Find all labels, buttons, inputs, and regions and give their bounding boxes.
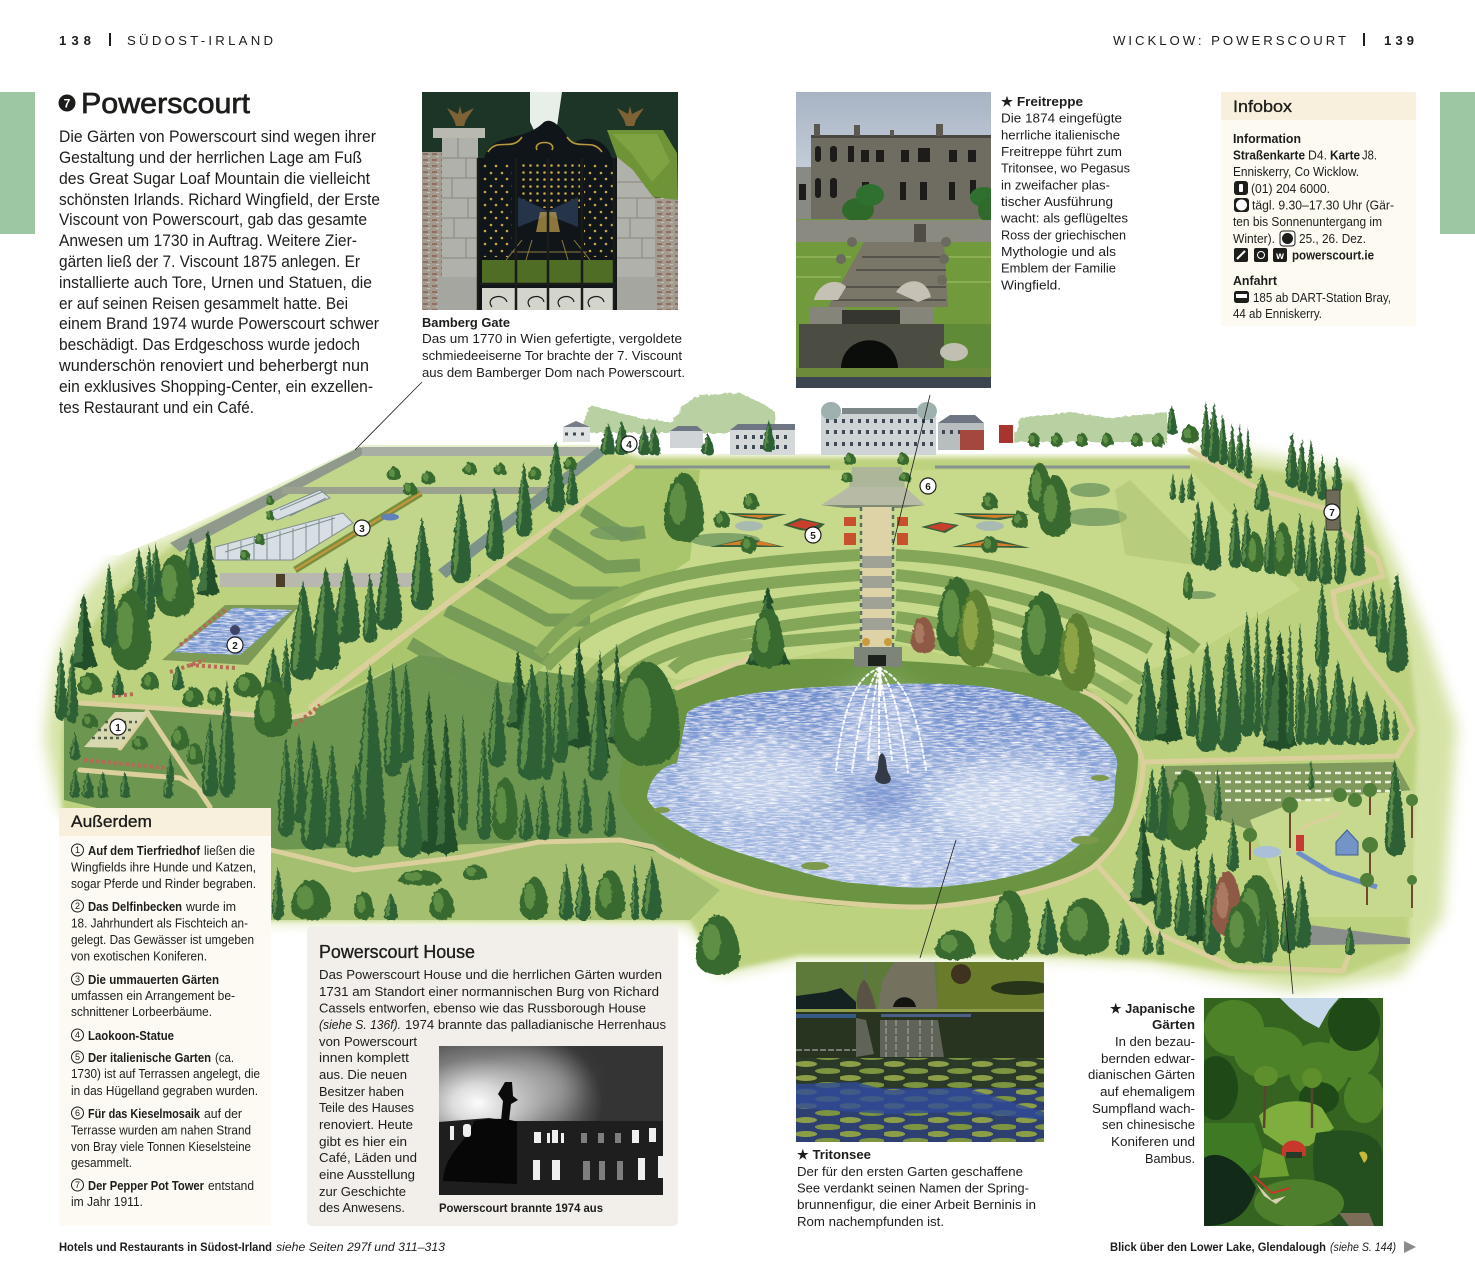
panel: Außerdem: 1 <box>75 845 80 855</box>
panel: Infobox: (01) 204 6000. <box>1251 181 1330 196</box>
side tab left <box>0 92 35 234</box>
caption: Japanische Gärten: sen chinesische <box>1102 1117 1195 1132</box>
intro text block: beschädigt. Das Erdgeschoss wurde jedoch <box>59 335 360 354</box>
intro text block: Viscount von Powerscourt, gab das gesamte <box>59 210 367 229</box>
trees south of the path <box>272 857 975 975</box>
panel: Außerdem: gelegt. Das Gewässer ist umgeben <box>71 932 254 947</box>
panel: Infobox <box>1221 92 1416 326</box>
avenue round trees <box>240 425 1199 560</box>
intro text block: Gestaltung und der herrlichen Lage am Fuß <box>59 148 362 167</box>
photo: Japanese gardens <box>1204 998 1383 1226</box>
panel: Außerdem: 5 <box>75 1052 80 1062</box>
photo caption: Bamberg Gate: Bamberg Gate <box>422 315 510 330</box>
ground <box>62 449 1418 976</box>
panel: Außerdem: 7 <box>75 1180 80 1190</box>
caption: Freitreppe: Emblem der Familie <box>1001 261 1116 276</box>
page header right: 139 <box>1384 33 1414 48</box>
panel: Außerdem: entstand <box>208 1178 254 1193</box>
caption: Tritonsee: brunnenfigur, die einer Arbeit Berninis in <box>797 1197 1036 1212</box>
central terrace and stairs <box>821 467 925 667</box>
panel: Infobox: Information <box>1233 131 1301 146</box>
caption: Japanische Gärten: ★ Japanische <box>1110 1001 1195 1016</box>
panel: Außerdem: (ca. <box>215 1050 234 1065</box>
panel: Infobox: ten bis Sonnenuntergang im <box>1233 214 1382 229</box>
panel: Außerdem: 4 <box>75 1030 80 1040</box>
caption: Freitreppe: in zweifacher plas- <box>1001 177 1110 192</box>
icon: closed <box>1280 231 1295 246</box>
panel: Powerscourt House: 1731 am Standort einer normannischen Burg von Richard <box>319 984 659 999</box>
number markers: 5 <box>810 531 816 542</box>
curved terrace arcs <box>538 555 1197 710</box>
caption: Japanische Gärten: Gärten <box>1152 1017 1195 1032</box>
panel: Außerdem: Wingfields ihre Hunde und Katzen, <box>71 860 256 874</box>
panel: Infobox: J8. <box>1362 148 1377 162</box>
photo caption: Bamberg Gate <box>422 315 685 380</box>
panel: Außerdem: 3 <box>75 974 80 984</box>
forest west of the lake <box>278 637 626 857</box>
walled garden cypress row <box>290 440 578 680</box>
side tab right <box>1440 92 1475 234</box>
upper lawn light <box>560 470 1300 690</box>
icon: bus <box>1234 291 1249 303</box>
panel: Infobox: tägl. 9.30–17.30 Uhr (Gär- <box>1252 198 1394 212</box>
numbered circles <box>72 844 84 1191</box>
title: Powerscourt <box>81 88 250 120</box>
panel: Außerdem: Terrasse wurden am nahen Strand <box>71 1122 251 1138</box>
footer left: siehe Seiten 297f und 311–313 <box>276 1240 445 1254</box>
lake surround <box>619 659 1138 907</box>
panel: Außerdem: von Bray viele Tonnen Kieselsteine <box>71 1139 251 1154</box>
panel: Powerscourt House: von Powerscourt <box>319 1034 417 1049</box>
house <box>563 402 1013 455</box>
panel: Powerscourt House: Café, Läden und <box>319 1150 417 1165</box>
panel: Außerdem: Auf dem Tierfriedhof <box>88 843 201 858</box>
panel: Außerdem: Der Pepper Pot Tower <box>88 1178 204 1193</box>
panel: Powerscourt House: Powerscourt brannte 1974 aus <box>439 1201 603 1215</box>
caption: Freitreppe <box>1000 94 1130 292</box>
caption: Tritonsee: Der für den ersten Garten geschaffene <box>797 1164 1023 1179</box>
panel: Außerdem <box>59 808 271 1226</box>
caption: Japanische Gärten: Koniferen und <box>1111 1134 1195 1149</box>
intro text block: Die Gärten von Powerscourt sind wegen ihrer <box>59 127 376 146</box>
panel: Powerscourt House <box>307 926 678 1226</box>
page header left <box>59 33 273 48</box>
panel: Außerdem: Die ummauerten Gärten <box>88 972 219 987</box>
panel: Powerscourt House: Cassels entworfen, ebenso wie das Russborough House <box>319 1000 646 1016</box>
title: 7 <box>64 96 71 110</box>
panel: Außerdem: gesammelt. <box>71 1155 132 1170</box>
palm trunks <box>1250 790 1412 908</box>
page header left: SÜDOST-IRLAND <box>127 33 273 48</box>
number markers: 2 <box>232 641 238 652</box>
photo caption: Bamberg Gate: aus dem Bamberger Dom nach Powerscourt. <box>422 365 685 380</box>
caption: Japanische Gärten: Sumpfland wach- <box>1092 1101 1195 1116</box>
intro text block: einem Brand 1974 wurde Powerscourt schwer <box>59 314 379 333</box>
number markers: 1 <box>115 723 121 734</box>
leader lines <box>355 382 1293 994</box>
panel: Powerscourt House: Besitzer haben <box>319 1084 404 1099</box>
paths <box>80 450 1413 971</box>
west pocket and forest floor <box>64 655 680 860</box>
panel: Infobox: Anfahrt <box>1233 273 1278 288</box>
lily pads <box>654 775 1109 870</box>
panel: Außerdem: 1730) ist auf Terrassen angelegt, die <box>71 1066 260 1081</box>
intro text block: wunderschön renoviert und beherbergt nun <box>58 356 369 375</box>
number markers <box>110 436 1340 735</box>
panel: Außerdem: Laokoon-Statue <box>88 1028 174 1043</box>
caption: Freitreppe: tischer Ausführung <box>1001 194 1113 209</box>
footer left <box>59 1240 445 1254</box>
caption: Tritonsee: ★ Tritonsee <box>797 1147 871 1162</box>
panel: Außerdem: 6 <box>75 1108 80 1118</box>
caption: Japanische Gärten: dianischen Gärten <box>1088 1067 1195 1082</box>
panel: Außerdem: im Jahr 1911. <box>71 1194 143 1209</box>
panel: Außerdem: ließen die <box>204 843 255 858</box>
right hill terraces <box>1115 480 1195 565</box>
intro text block: Anwesen um 1730 in Auftrag. Weitere Zier- <box>59 231 357 250</box>
top edge mask <box>0 418 1190 555</box>
panel: Außerdem: 2 <box>75 901 80 911</box>
panel: Powerscourt House: (siehe S. 136f). <box>319 1017 401 1032</box>
panel: Außerdem: Außerdem <box>71 812 152 831</box>
garden beds <box>295 493 421 570</box>
caption: Japanische Gärten <box>1088 1001 1195 1166</box>
panel: Außerdem: sogar Pferde und Rinder begraben. <box>71 876 256 891</box>
panel: Außerdem: schnittener Lorbeerbäume. <box>71 1004 212 1019</box>
intro text block: installierte auch Tore, Urnen und Statuen, die <box>59 273 372 292</box>
pet cemetery <box>84 712 147 748</box>
trees <box>55 402 1408 975</box>
panel: Außerdem: Der italienische Garten <box>88 1050 211 1065</box>
caption: Japanische Gärten: bernden edwar- <box>1101 1051 1195 1066</box>
panel: Powerscourt House: des Anwesens. <box>319 1200 405 1215</box>
caption: Freitreppe: Tritonsee, wo Pegasus <box>1001 161 1130 176</box>
greenhouses <box>215 513 353 560</box>
panel: Außerdem: Für das Kieselmosaik <box>88 1106 201 1121</box>
panel: Powerscourt House: Powerscourt House <box>319 942 475 962</box>
panel: Powerscourt House: eine Ausstellung <box>319 1167 415 1182</box>
panel: Powerscourt House: Teile des Hauses <box>319 1100 414 1115</box>
panel: Infobox: 44 ab Enniskerry. <box>1233 306 1322 321</box>
panel: Infobox: Infobox <box>1233 97 1293 116</box>
pale outer ground wash <box>45 445 1457 992</box>
number markers: 6 <box>925 482 931 493</box>
panel: Infobox: Enniskerry, Co Wicklow. <box>1233 164 1359 179</box>
fountain statue <box>875 753 891 784</box>
panel: Infobox: powerscourt.ie <box>1292 248 1374 262</box>
page header left: 138 <box>59 33 91 48</box>
caption: Freitreppe: Freitreppe führt zum <box>1001 144 1122 159</box>
panel: Powerscourt House: innen komplett <box>319 1050 409 1065</box>
slope <box>311 467 700 707</box>
parterres <box>710 513 1030 548</box>
pepper pot tower <box>1326 490 1340 530</box>
caption: Freitreppe: ★ Freitreppe <box>1001 94 1083 109</box>
house cypresses <box>601 420 775 455</box>
east forest <box>1136 611 1398 752</box>
number markers: 4 <box>626 440 632 451</box>
photo: Tritonsee <box>796 962 1044 1142</box>
fountain <box>836 668 926 774</box>
photo caption: Bamberg Gate: schmiedeeiserne Tor brachte der 7. Viscount <box>422 348 682 363</box>
intro text block: des Great Sugar Loaf Mountain die vielleicht <box>59 169 370 188</box>
big tree at lake <box>614 662 680 766</box>
panel: Außerdem: auf der <box>204 1106 243 1121</box>
caption: Tritonsee: Rom nachempfunden ist. <box>797 1214 944 1229</box>
panel: Außerdem: umfassen ein Arrangement be- <box>71 988 235 1003</box>
panel: Außerdem: Das Delfinbecken <box>88 899 182 914</box>
panel: Infobox: Winter). <box>1233 231 1275 246</box>
icon: telephone <box>1234 181 1248 195</box>
lawn specimen trees <box>664 463 1193 691</box>
caption: Freitreppe: Wingfield. <box>1001 277 1061 292</box>
intro text block: schönsten Irlands. Richard Wingfield, der Erste <box>59 190 380 209</box>
blue hut <box>1336 830 1358 855</box>
photo: burning house <box>439 1046 663 1195</box>
panel: Infobox: Straßenkarte <box>1233 148 1305 162</box>
caption: Japanische Gärten: In den bezau- <box>1115 1034 1195 1049</box>
lawn shadows <box>590 483 1216 599</box>
icon: facilities: w <box>1275 251 1284 262</box>
icon: opening hours <box>1234 198 1249 212</box>
panel: Infobox: 25., 26. Dez. <box>1299 231 1366 246</box>
intro text block: tes Restaurant und ein Café. <box>59 398 254 417</box>
intro text block: er auf seinen Reisen gesammelt hatte. Bei <box>59 294 348 313</box>
panel: Außerdem: wurde im <box>185 899 236 914</box>
panel: Powerscourt House: renoviert. Heute <box>319 1117 413 1132</box>
caption: Freitreppe: Ross der griechischen <box>1001 227 1126 242</box>
far left forest <box>55 530 292 798</box>
house background bushes <box>580 393 1167 442</box>
photo caption: Bamberg Gate: Das um 1770 in Wien gefertigte, vergoldete <box>422 331 682 346</box>
dolphin pond <box>162 605 300 665</box>
panel: Außerdem: von exotischen Koniferen. <box>71 948 207 964</box>
caption: Tritonsee: See verdankt seinen Namen der Spring- <box>797 1180 1029 1196</box>
illustration: garden aerial view <box>0 382 1457 994</box>
stream <box>1297 852 1377 887</box>
panel: Powerscourt House: aus. Die neuen <box>319 1067 407 1082</box>
caption: Freitreppe: Die 1874 eingefügte <box>1001 111 1122 126</box>
panel: Powerscourt House: Das Powerscourt House und die herrlichen Gärten wurden <box>319 967 662 982</box>
panel: Powerscourt House: 1974 brannte das palladianische Herrenhaus <box>405 1017 666 1032</box>
footer left: Hotels und Restaurants in Südost-Irland <box>59 1240 272 1254</box>
panel: Powerscourt House: gibt es hier ein <box>319 1134 407 1149</box>
panel: Powerscourt House: zur Geschichte <box>319 1184 406 1199</box>
intro text block <box>58 127 380 417</box>
panel: Infobox: D4. <box>1308 148 1327 162</box>
caption: Freitreppe: wacht: als geflügeltes <box>1000 211 1128 226</box>
number markers: 7 <box>1329 508 1335 519</box>
panel: Infobox: Karte <box>1330 148 1360 162</box>
photo: Freitreppe <box>796 92 991 388</box>
caption: Japanische Gärten: Bambus. <box>1145 1151 1195 1166</box>
caption: Freitreppe: herrliche italienische <box>1001 127 1120 142</box>
balustrade <box>635 466 1190 468</box>
caption: Tritonsee <box>797 1147 1036 1229</box>
southeast forest <box>990 760 1405 963</box>
northeast cypress groups <box>1167 402 1408 672</box>
panel: Außerdem: in das Hügelland gegraben wurden. <box>71 1083 258 1098</box>
page header right: WICKLOW: POWERSCOURT <box>1113 33 1346 48</box>
footer right: (siehe S. 144) <box>1330 1240 1396 1254</box>
caption: Japanische Gärten: auf ehemaligem <box>1100 1084 1195 1099</box>
walled garden <box>170 447 598 587</box>
photo: Bamberg Gate <box>422 92 678 310</box>
intro text block: ein exklusives Shopping-Center, ein exzellen- <box>59 377 373 396</box>
panel: Infobox: 185 ab DART-Station Bray, <box>1253 290 1391 305</box>
caption: Freitreppe: Mythologie und als <box>1001 244 1116 259</box>
intro text block: gärten ließ der 7. Viscount 1875 anlegen. Er <box>59 252 360 271</box>
flower beds <box>84 610 320 768</box>
right meadow <box>1165 762 1413 830</box>
icon: facilities <box>1234 248 1287 262</box>
footer right: Blick über den Lower Lake, Glendalough <box>1110 1240 1326 1254</box>
panel: Außerdem: 18. Jahrhundert als Fischteich an- <box>71 916 248 930</box>
number markers: 3 <box>359 524 365 535</box>
lake <box>647 684 1117 888</box>
left slope terrace bands <box>410 510 645 690</box>
